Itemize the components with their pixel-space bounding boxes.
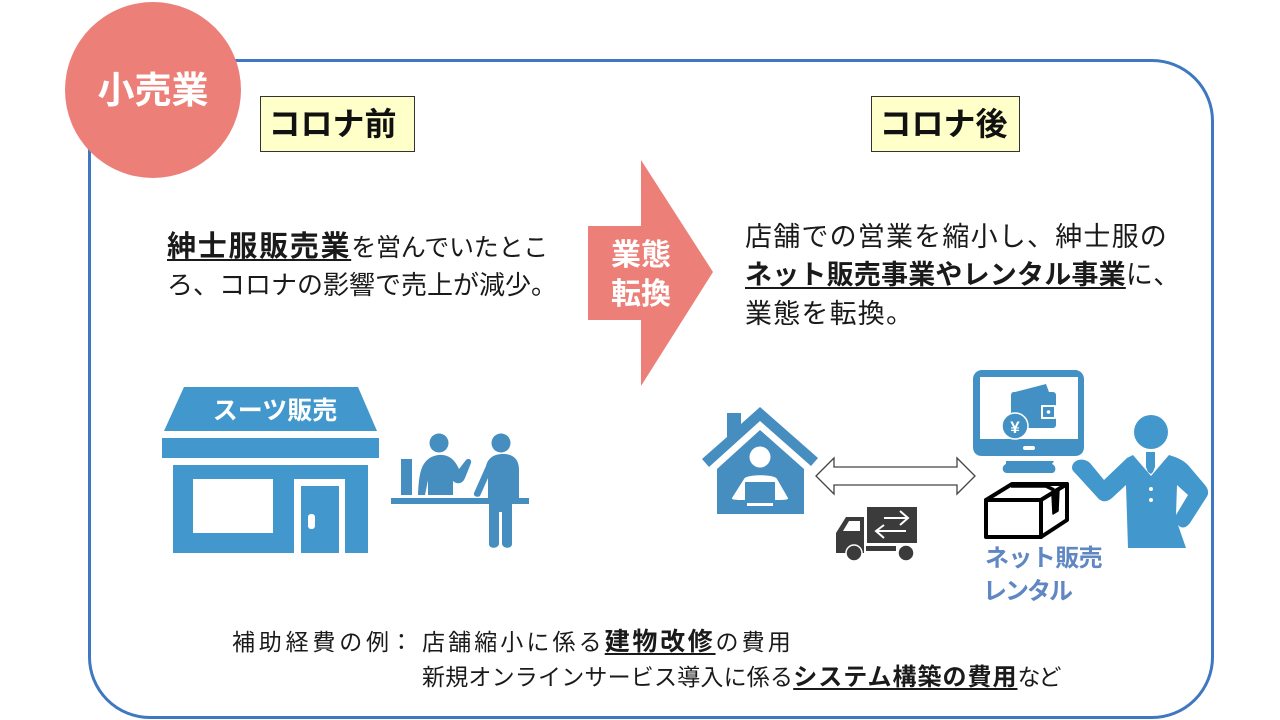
label: online sales and rental: ネット販売 — [985, 545, 1102, 572]
text block: after description: ネット販売事業やレンタル事業に、 — [745, 260, 1181, 290]
text block: after description: 店舗での営業を縮小し、紳士服の — [745, 222, 1168, 252]
text block: before description: 紳士服販売業を営んでいたとこ — [167, 231, 548, 263]
icon: monitor with wallet: ¥ — [1010, 418, 1020, 437]
arrow: business conversion: 転換 — [611, 278, 671, 311]
heading: before COVID — [260, 96, 415, 152]
heading: after COVID: コロナ後 — [879, 106, 1008, 142]
text block: subsidy examples: 新規オンラインサービス導入に係るシステム構築の費用など — [422, 664, 1059, 691]
heading: after COVID — [871, 96, 1020, 152]
icon: suit store: スーツ販売 — [213, 397, 337, 425]
badge: retail industry: 小売業 — [98, 70, 208, 111]
text block: after description: 業態を転換。 — [745, 299, 914, 329]
text block: before description: ろ、コロナの影響で売上が減少。 — [167, 270, 557, 300]
badge: retail industry — [65, 2, 241, 178]
heading: before COVID: コロナ前 — [268, 106, 396, 142]
text block: subsidy example label: 補助経費の例： — [232, 629, 417, 655]
text block: after description — [745, 222, 1181, 329]
text block: before description — [167, 231, 557, 300]
text block: subsidy examples: 店舗縮小に係る建物改修の費用 — [422, 628, 794, 656]
arrow: business conversion: 業態 — [611, 239, 671, 272]
text block: subsidy examples — [422, 628, 1061, 691]
label: online sales and rental: レンタル — [983, 578, 1071, 605]
label: online sales and rental — [983, 545, 1102, 605]
